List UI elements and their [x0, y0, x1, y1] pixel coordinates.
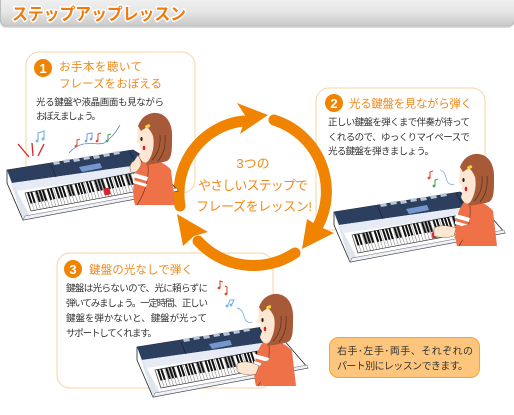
step 3 music notes: [218, 281, 252, 323]
step 3 body: [66, 282, 208, 340]
step 2 body: くれるので、ゆっくりマイペースで: [328, 132, 470, 144]
center message: [196, 156, 312, 214]
step 1 heading: フレーズをおぼえる: [59, 76, 162, 90]
step 1 music notes: [36, 125, 120, 153]
step 1 content: [34, 59, 164, 122]
arrow: to step 3: [274, 120, 334, 249]
panel: step 1: [26, 52, 195, 193]
arrow: to step 1: [177, 214, 295, 266]
step 1 girl: [130, 113, 175, 205]
step 1 heading: [59, 60, 162, 90]
title: ステップアップレッスン: [12, 5, 186, 24]
number badge 3: [64, 260, 82, 278]
callout: part lessons: [330, 338, 480, 378]
step 3 heading: 鍵盤の光なしで弾く: [89, 262, 193, 276]
step 1 heading: お手本を聴いて: [59, 60, 142, 74]
panel: step 2: [316, 88, 485, 230]
step 1 body: [36, 96, 164, 122]
callout: part lessons: 右手･左手･両手、それぞれの: [337, 344, 473, 358]
step 1 body: 光る鍵盤や液晶画面も見ながら: [36, 96, 164, 108]
step 2 content: [325, 94, 472, 158]
step 3 body: 鍵盤は光らないので、光に頼らずに: [66, 282, 208, 294]
number badge 2: 2: [330, 96, 338, 111]
arrow: to step 2: [179, 103, 268, 206]
step 3 body: 弾いてみましょう。一定時間、正しい: [66, 298, 208, 310]
step 2 keyboard: [334, 192, 505, 262]
step 1 keyboard: [7, 150, 178, 220]
panel: step 3: [57, 253, 273, 388]
step 3 content: [64, 260, 208, 340]
cycle arrows: [177, 103, 334, 266]
center message: 3つの: [236, 156, 270, 171]
number badge 1: 1: [39, 61, 47, 76]
center message: やさしいステップで: [198, 178, 308, 193]
step 2 body: 光る鍵盤を弾きましょう。: [328, 146, 434, 158]
callout: part lessons: パート別にレッスンできます。: [337, 360, 468, 372]
step 3 girl: [237, 294, 296, 386]
step 1 red burst: [18, 143, 44, 157]
step 3 body: サポートしてくれます。: [66, 328, 157, 340]
center message: フレーズをレッスン!: [196, 199, 312, 214]
step 3 keyboard: [137, 327, 308, 397]
step 2 girl: [434, 154, 497, 246]
step 2 body: 正しい鍵盤を弾くまで伴奏が待って: [328, 116, 470, 128]
number badge 3: 3: [69, 262, 77, 277]
step 3 body: 鍵盤を弾かないと、鍵盤が光って: [66, 312, 207, 324]
header bar: [0, 0, 514, 28]
step 2 music notes: [428, 170, 454, 187]
step 2 body: [328, 116, 470, 158]
step 1 body: おぼえましょう。: [36, 112, 101, 122]
step 2 heading: 光る鍵盤を見ながら弾く: [349, 96, 472, 110]
number badge 2: [325, 94, 343, 112]
